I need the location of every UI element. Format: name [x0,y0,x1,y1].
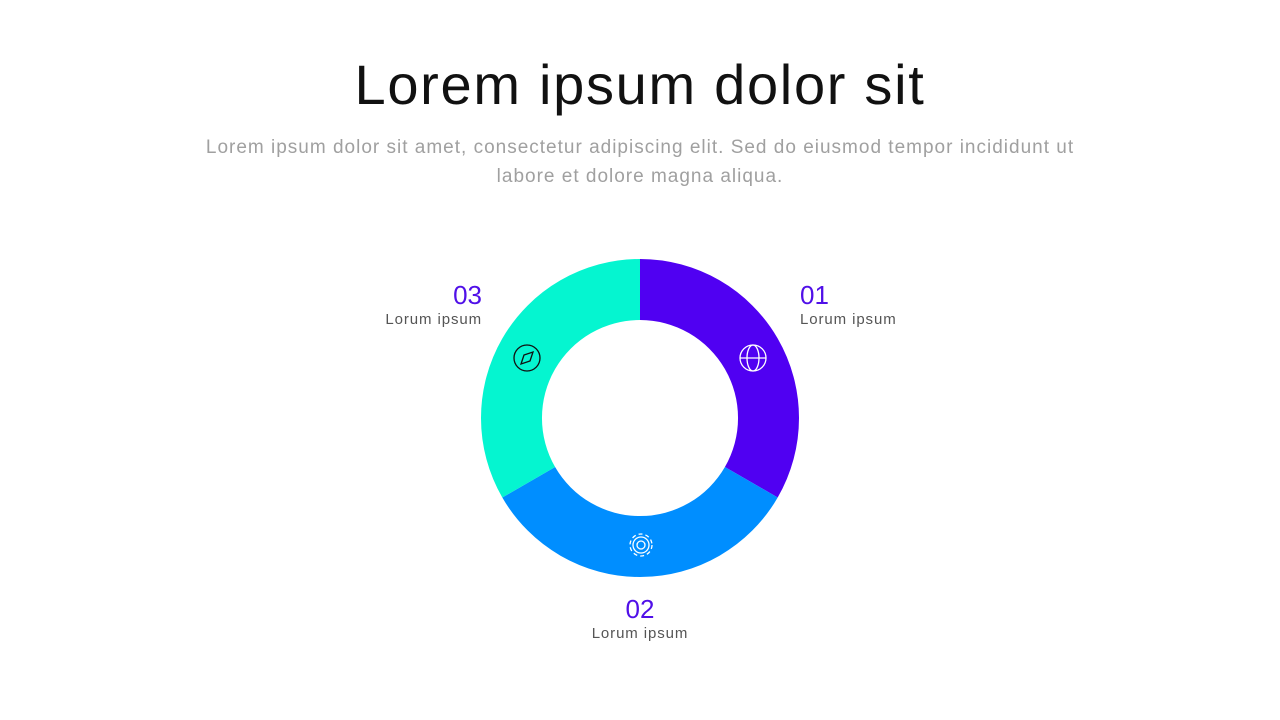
title: Lorem ipsum dolor sit [354,53,926,116]
text: 01 [800,280,829,310]
text: Lorum ipsum [800,311,897,328]
icon: gear [630,534,652,556]
segment 02 [502,467,778,577]
label 03 [385,280,482,328]
segment 01 [640,259,799,498]
label 01 [800,280,897,328]
text: 02 [626,594,654,624]
icon: globe [740,345,766,371]
label 02 [592,594,688,642]
subtitle: Lorem ipsum dolor sit amet, consectetur adipiscing elit. Sed do eiusmod tempor incididunt ut [206,137,1074,158]
subtitle [206,137,1074,187]
icon: compass [514,345,540,371]
text: Lorum ipsum [385,311,482,328]
subtitle: labore et dolore magna aliqua. [497,166,783,187]
text: 03 [453,280,482,310]
segment 03 [481,259,640,498]
text: Lorum ipsum [592,625,688,642]
